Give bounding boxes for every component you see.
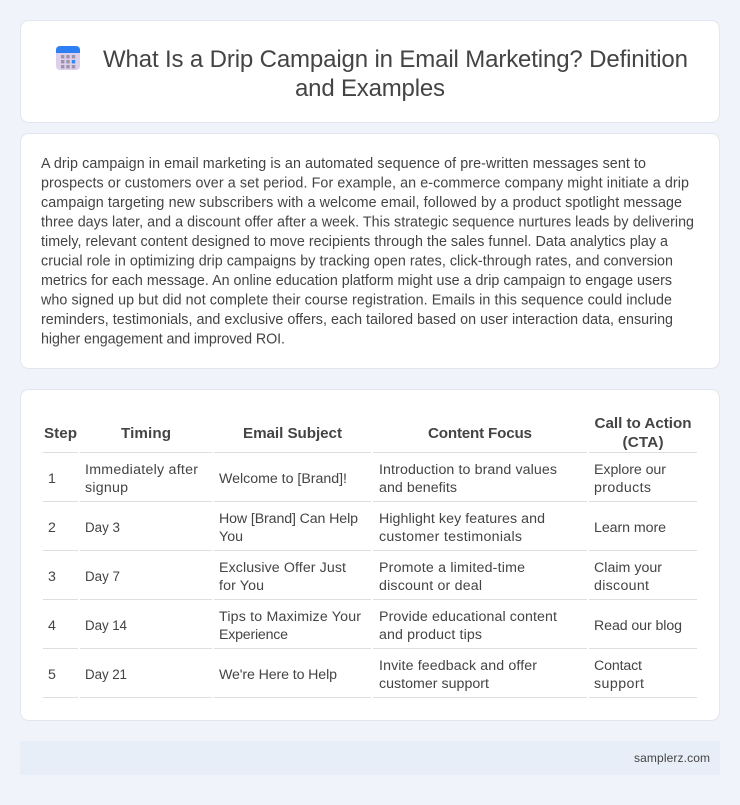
- table row: step 1: Explore our: [594, 462, 666, 478]
- table row: step 4: 4: [48, 618, 56, 634]
- table row: step 2: customer testimonials: [379, 529, 522, 545]
- table row: step 3: discount: [594, 578, 649, 594]
- table row: step 4: Read our blog: [594, 618, 682, 634]
- table row: step 1: products: [594, 480, 651, 496]
- footer bar: [20, 741, 720, 775]
- table header row: [44, 415, 692, 451]
- text block: drip campaign description: A drip campaign in email marketing is an automated sequence of pre-written messages sent to: [41, 156, 646, 172]
- text block: drip campaign description: crucial role in optimizing drip campaigns by tracking open rates, click-through rates, and conversion: [41, 254, 673, 270]
- table header row: Step: [44, 425, 77, 442]
- table row: step 3: Exclusive Offer Just: [219, 560, 346, 576]
- table row: step 4: Experience: [219, 627, 288, 643]
- table row: step 4: and product tips: [379, 627, 482, 643]
- table row: step 3: for You: [219, 578, 264, 594]
- text block: drip campaign description: prospects or customers over a set period. For example, an e-commerce company might initiate a drip: [41, 176, 689, 192]
- table row: step 5: 5: [48, 667, 56, 683]
- table row: step 4: Day 14: [85, 618, 128, 633]
- table row: step 5: support: [594, 676, 644, 692]
- text block: drip campaign description: who signed up but did not complete their course registration. Emails in this sequence could include: [40, 292, 672, 308]
- table row: step 2: How [Brand] Can Help: [219, 511, 358, 527]
- table row: step 2: Highlight key features and: [379, 511, 545, 527]
- table row: step 5: [48, 658, 644, 692]
- table row: step 2: 2: [48, 520, 56, 536]
- table row: step 3: discount or deal: [379, 578, 482, 594]
- table header row: Content Focus: [428, 425, 532, 442]
- table row: step 5: customer support: [379, 676, 489, 692]
- text block: drip campaign description: three days later, and a discount offer after a week. This strategic sequence nurtures leads by delivering: [41, 214, 694, 230]
- table row: step 3: 3: [48, 569, 56, 585]
- text block: drip campaign description: higher engagement and improved ROI.: [41, 332, 285, 348]
- table row: step 4: [48, 609, 682, 643]
- table row: step 1: signup: [85, 480, 128, 496]
- table header row: Timing: [121, 425, 171, 442]
- table row: step 2: [48, 511, 666, 545]
- table header row: Call to Action: [594, 415, 692, 432]
- table row: step 2: Learn more: [594, 520, 666, 536]
- text block: drip campaign description: metrics for each message. An online education platform might use a drip campaign to engage users: [41, 273, 672, 289]
- title: What Is a Drip Campaign in Email Marketing? Definition: [103, 46, 688, 73]
- footer bar: samplerz.com: [634, 751, 710, 765]
- table row: step 1: Immediately after: [85, 462, 198, 478]
- table row: step 2: You: [219, 529, 243, 545]
- panel: title card: [20, 20, 720, 122]
- title: [103, 46, 688, 102]
- table row: step 5: Contact: [594, 658, 642, 674]
- table row: step 3: Day 7: [85, 569, 120, 584]
- table header row: (CTA): [622, 434, 664, 451]
- text block: drip campaign description: [40, 156, 694, 348]
- table row: step 4: Tips to Maximize Your: [219, 609, 361, 625]
- table row: step 5: We're Here to Help: [219, 667, 337, 683]
- text block: drip campaign description: campaign targeting new subscribers with a welcome email, followed by a product spotlight message: [41, 195, 682, 211]
- table row: step 1: [48, 462, 666, 496]
- table row: step 5: Invite feedback and offer: [379, 658, 537, 674]
- table row: step 1: and benefits: [379, 480, 457, 496]
- table row: step 5: Day 21: [85, 667, 127, 682]
- icon: calendar: [56, 46, 80, 70]
- panel: description: [20, 134, 720, 368]
- table row: step 1: 1: [48, 471, 56, 487]
- table row: step 4: Provide educational content: [379, 609, 557, 625]
- table header row: Email Subject: [243, 425, 342, 442]
- table row: step 3: [48, 560, 662, 594]
- table row: step 3: Claim your: [594, 560, 662, 576]
- table row: step 3: Promote a limited-time: [379, 560, 525, 576]
- table row: step 2: Day 3: [85, 520, 120, 535]
- text block: drip campaign description: timely, relevant content designed to move recipients through the sales funnel. Data analytics play a: [41, 234, 668, 250]
- panel: drip campaign table: [20, 390, 720, 720]
- text block: drip campaign description: reminders, testimonials, and exclusive offers, each tailored based on user interaction data, ensuring: [41, 312, 673, 328]
- title: and Examples: [295, 75, 445, 102]
- table row: step 1: Introduction to brand values: [379, 462, 557, 478]
- table row: step 1: Welcome to [Brand]!: [219, 471, 347, 487]
